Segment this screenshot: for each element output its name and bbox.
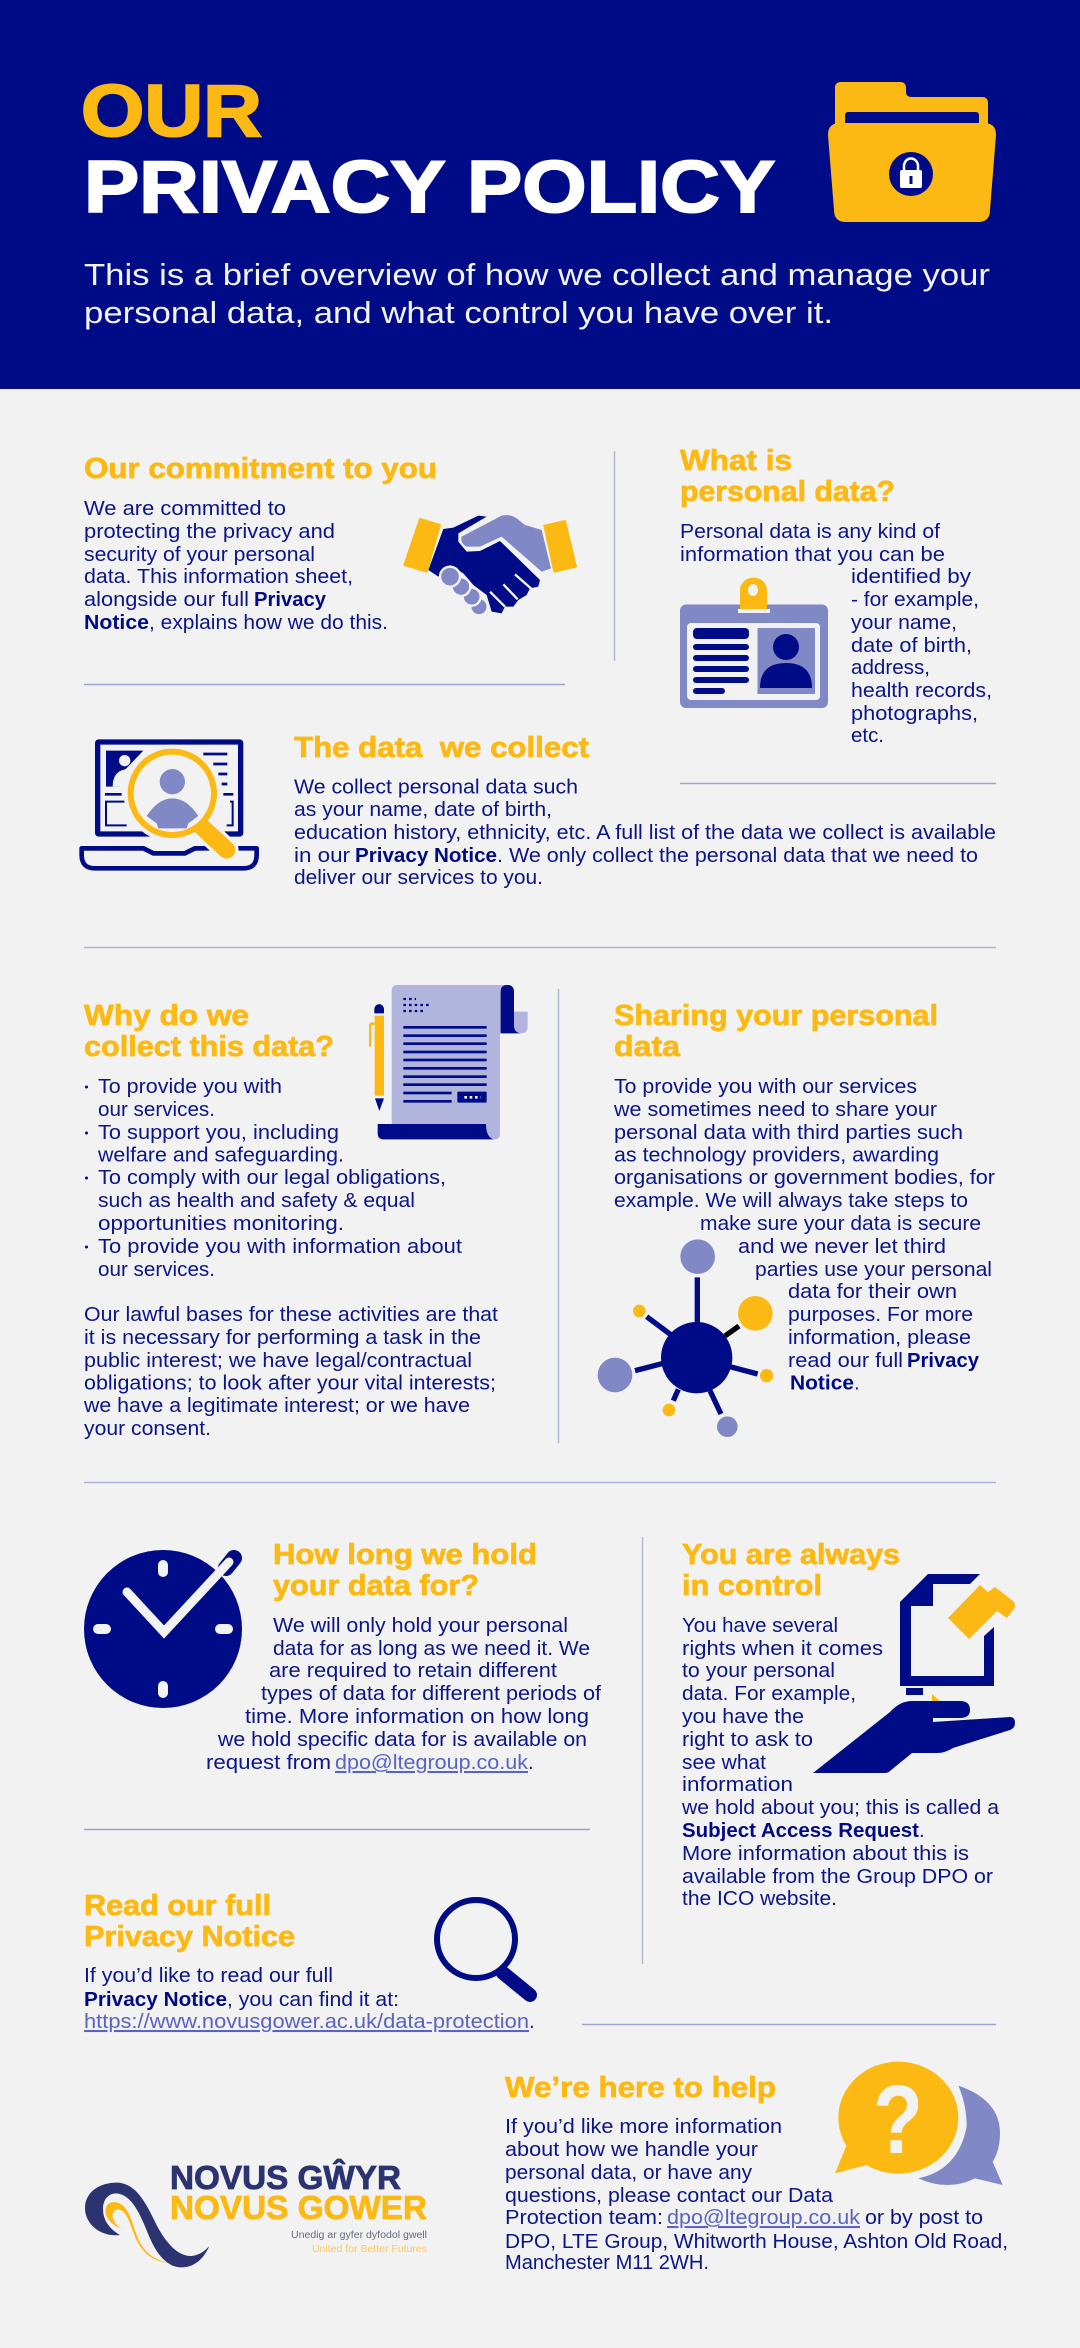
- text: personal data body: etc.: [851, 724, 884, 747]
- text: how long body: [206, 1614, 601, 1774]
- text: control body: You have several: [682, 1614, 838, 1637]
- text: reasons bullet list: welfare and safeguarding.: [97, 1144, 344, 1166]
- text: commitment body: security of your personal: [84, 543, 315, 566]
- subtitle: This is a brief overview of how we collect and manage your: [84, 257, 990, 292]
- text: sharing body: Notice: [790, 1372, 854, 1394]
- icon: speech bubbles with question mark: [835, 2062, 1003, 2185]
- text: data collect body: deliver our services to you.: [294, 866, 543, 889]
- text: lawful bases: your consent.: [84, 1417, 211, 1440]
- logo wordmark: United for Better Futures: [312, 2244, 427, 2255]
- text: reasons bullet list: opportunities monitoring.: [98, 1212, 344, 1235]
- text: read notice body: .: [529, 2010, 535, 2033]
- text: data collect body: We collect personal data such: [294, 776, 578, 798]
- heading: why do we collect: collect this data?: [84, 1031, 334, 1063]
- text: how long body: time. More information on how long: [245, 1705, 589, 1728]
- text: sharing body: example. We will always take steps to: [614, 1189, 968, 1212]
- text: help body: dpo@ltegroup.co.uk: [667, 2206, 861, 2229]
- text: commitment body: alongside our full: [84, 588, 249, 611]
- text: personal data body: address,: [851, 656, 930, 679]
- text: reasons bullet list: such as health and safety & equal: [98, 1189, 415, 1212]
- text: reasons bullet list: our services.: [98, 1258, 215, 1281]
- text: control body: rights when it comes: [682, 1637, 883, 1660]
- text: data collect body: [294, 776, 996, 889]
- text: personal data body: date of birth,: [851, 634, 972, 657]
- text: read notice body: If you’d like to read our full: [84, 1964, 333, 1987]
- heading: read our full privacy notice: Privacy Notice: [84, 1921, 295, 1953]
- text: commitment body: Privacy: [254, 588, 327, 611]
- heading: our commitment: Our commitment to you: [84, 453, 437, 485]
- heading: sharing your personal data: data: [614, 1031, 681, 1063]
- text: help body: If you’d like more information: [505, 2115, 782, 2138]
- text: sharing body: Privacy: [907, 1349, 980, 1372]
- heading: the data we collect: The data we collect: [294, 732, 589, 764]
- text: read notice body: [84, 1964, 535, 2033]
- text: reasons bullet list: To comply with our legal obligations,: [98, 1166, 446, 1189]
- panel: read full privacy notice: [84, 1890, 535, 2033]
- text: help body: Manchester M11 2WH.: [505, 2251, 709, 2274]
- text: control body: .: [919, 1819, 925, 1842]
- icon: locked folder: [828, 82, 996, 222]
- text: reasons bullet list: To provide you with: [98, 1075, 282, 1098]
- text: reasons bullet list: [85, 1075, 462, 1281]
- text: sharing body: organisations or government bodies, for: [614, 1166, 995, 1189]
- text: help body: about how we handle your: [505, 2138, 758, 2161]
- text: commitment body: protecting the privacy and: [84, 520, 335, 543]
- heading: always in control: You are always: [682, 1539, 900, 1571]
- panel: sharing your data: [598, 1000, 995, 1437]
- text: read notice body: , you can find it at:: [227, 1988, 399, 2011]
- text: data collect body: Privacy Notice: [355, 844, 497, 867]
- text: data collect body: as your name, date of birth,: [294, 798, 552, 821]
- title: [81, 71, 775, 228]
- text: read notice body: https://www.novusgower.ac.uk/data-protection: [84, 2010, 529, 2033]
- text: sharing body: data for their own: [788, 1280, 957, 1303]
- text: control body: data. For example,: [682, 1682, 856, 1705]
- subtitle: personal data, and what control you have over it.: [84, 295, 833, 330]
- text: personal data body: information that you can be: [680, 543, 945, 566]
- text: how long body: we hold specific data for is available on: [217, 1728, 587, 1751]
- icon: laptop with magnifier: [82, 742, 257, 868]
- logo wordmark: NOVUS GOWER: [170, 2189, 427, 2226]
- text: sharing body: we sometimes need to share your: [613, 1098, 937, 1121]
- text: commitment body: , explains how we do this.: [149, 611, 388, 634]
- text: personal data body: your name,: [851, 611, 957, 634]
- text: lawful bases: public interest; we have legal/contractual: [84, 1349, 472, 1372]
- text: sharing body: as technology providers, awarding: [614, 1144, 939, 1166]
- text: lawful bases: obligations; to look after your vital interests;: [84, 1372, 496, 1394]
- text: control body: [681, 1614, 1000, 1910]
- text: control body: to your personal: [682, 1659, 835, 1682]
- text: how long body: .: [528, 1751, 534, 1774]
- text: reasons bullet list: To provide you with information about: [98, 1235, 462, 1258]
- text: how long body: We will only hold your personal: [273, 1614, 568, 1637]
- text: sharing body: .: [854, 1372, 860, 1394]
- text: sharing body: parties use your personal: [755, 1258, 992, 1281]
- heading: what is personal data: personal data?: [680, 476, 895, 508]
- text: commitment body: data. This information sheet,: [84, 565, 353, 588]
- heading: what is personal data: [680, 445, 895, 508]
- text: personal data body: [680, 520, 992, 747]
- text: reasons bullet list: To support you, including: [98, 1121, 339, 1144]
- title: PRIVACY POLICY: [84, 147, 775, 228]
- text: help body: or by post to: [865, 2206, 983, 2229]
- text: how long body: types of data for different periods of: [261, 1682, 601, 1705]
- text: data collect body: . We only collect the personal data that we need to: [497, 844, 978, 867]
- heading: read our full privacy notice: Read our full: [84, 1890, 271, 1922]
- text: help body: Protection team:: [505, 2206, 663, 2229]
- heading: why do we collect: [84, 1000, 334, 1063]
- text: control body: right to ask to: [682, 1728, 813, 1751]
- text: sharing body: and we never let third: [738, 1235, 946, 1258]
- panel: always in control: [681, 1539, 1015, 1910]
- text: data collect body: in our: [294, 844, 350, 867]
- subtitle: [84, 257, 990, 330]
- heading: why do we collect: Why do we: [84, 1000, 249, 1032]
- icon: id card: [680, 578, 828, 708]
- panel: why do we collect: [83, 985, 528, 1440]
- text: control body: you have the: [682, 1705, 804, 1728]
- text: how long body: are required to retain different: [269, 1659, 557, 1682]
- divider: [614, 451, 616, 661]
- text: control body: More information about this is: [682, 1842, 969, 1865]
- text: help body: [505, 2115, 1008, 2274]
- text: reasons bullet list: our services.: [98, 1098, 215, 1121]
- heading: always in control: in control: [682, 1570, 822, 1602]
- panel: here to help: [505, 2062, 1008, 2274]
- text: personal data body: photographs,: [851, 702, 978, 725]
- heading: sharing your personal data: [614, 1000, 938, 1063]
- heading: sharing your personal data: Sharing your personal: [614, 1000, 938, 1032]
- heading: always in control: [682, 1539, 900, 1602]
- panel: our commitment: [84, 453, 576, 634]
- text: control body: the ICO website.: [682, 1887, 837, 1910]
- text: read notice body: Privacy Notice: [84, 1988, 227, 2011]
- heading: what is personal data: What is: [680, 445, 792, 477]
- text: lawful bases: [83, 1303, 498, 1440]
- text: help body: personal data, or have any: [505, 2161, 753, 2184]
- text: how long body: data for as long as we need it. We: [273, 1637, 590, 1660]
- text: control body: available from the Group DPO or: [682, 1865, 993, 1888]
- text: help body: DPO, LTE Group, Whitworth House, Ashton Old Road,: [505, 2230, 1008, 2253]
- logo wordmark: NOVUS GŴYR: [170, 2159, 401, 2196]
- text: sharing body: To provide you with our services: [614, 1075, 917, 1098]
- icon: document and pencil: [369, 985, 528, 1139]
- text: sharing body: make sure your data is secure: [700, 1212, 981, 1235]
- text: lawful bases: it is necessary for performing a task in the: [84, 1326, 481, 1349]
- panel: how long we hold data: [84, 1539, 601, 1774]
- text: personal data body: Personal data is any kind of: [680, 520, 940, 543]
- text: commitment body: [84, 497, 388, 634]
- text: data collect body: education history, ethnicity, etc. A full list of the data we collect is available: [294, 821, 996, 844]
- text: help body: questions, please contact our Data: [505, 2184, 834, 2207]
- text: control body: Subject Access Request: [682, 1819, 919, 1842]
- text: sharing body: information, please: [788, 1326, 971, 1349]
- text: sharing body: personal data with third parties such: [614, 1121, 963, 1144]
- text: lawful bases: we have a legitimate interest; or we have: [83, 1394, 470, 1417]
- logo swirl: [85, 2183, 209, 2267]
- text: sharing body: purposes. For more: [788, 1303, 973, 1326]
- header banner: [0, 0, 1080, 389]
- icon: handshake: [404, 515, 576, 615]
- text: personal data body: health records,: [851, 679, 992, 702]
- text: lawful bases: Our lawful bases for these activities are that: [84, 1303, 498, 1326]
- text: control body: see what: [682, 1751, 766, 1774]
- title: OUR: [81, 71, 262, 152]
- icon: speech bubbles with question mark: ?: [873, 2065, 923, 2174]
- heading: read our full privacy notice: [84, 1890, 295, 1953]
- icon: network nodes: [598, 1239, 773, 1437]
- logo wordmark: [170, 2159, 427, 2255]
- icon: document held in hand: [813, 1574, 1015, 1773]
- heading: how long we hold: [273, 1539, 537, 1602]
- text: commitment body: Notice: [84, 611, 149, 634]
- text: how long body: dpo@ltegroup.co.uk: [335, 1751, 529, 1774]
- text: personal data body: identified by: [851, 565, 972, 588]
- text: control body: we hold about you; this is called a: [681, 1796, 1000, 1819]
- text: commitment body: We are committed to: [84, 497, 286, 520]
- logo: Novus Gower: [85, 2159, 427, 2267]
- icon: clock: [84, 1550, 242, 1708]
- text: sharing body: read our full: [788, 1349, 903, 1372]
- icon: magnifying glass: [437, 1900, 530, 1995]
- panel: what is personal data: [680, 445, 992, 747]
- text: control body: information: [682, 1773, 793, 1796]
- text: sharing body: [613, 1075, 995, 1394]
- panel: the data we collect: [82, 732, 996, 889]
- logo wordmark: Unedig ar gyfer dyfodol gwell: [291, 2230, 427, 2241]
- heading: how long we hold: your data for?: [273, 1570, 479, 1602]
- heading: how long we hold: How long we hold: [273, 1539, 537, 1571]
- text: personal data body: - for example,: [851, 588, 979, 611]
- text: how long body: request from: [206, 1751, 331, 1774]
- heading: here to help: We’re here to help: [505, 2072, 776, 2104]
